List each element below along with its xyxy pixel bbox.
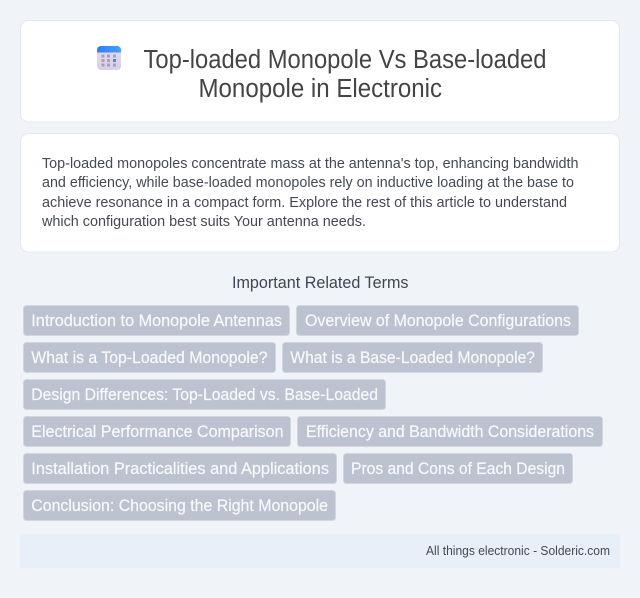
footer text: All things electronic - Solderic.com xyxy=(426,544,610,558)
tag: conclusion: Conclusion: Choosing the Right Monopole xyxy=(31,497,328,515)
tag: pros and cons xyxy=(344,454,572,484)
summary paragraph: Top-loaded monopoles concentrate mass at the antenna's top, enhancing bandwidth xyxy=(42,155,578,172)
summary paragraph xyxy=(41,155,579,230)
tag: pros and cons: Pros and Cons of Each Design xyxy=(351,460,565,478)
tag: design differences xyxy=(24,380,386,410)
title xyxy=(144,46,546,103)
tag: efficiency: Efficiency and Bandwidth Considerations xyxy=(306,423,594,441)
tag: installation: Installation Practicalities and Applications xyxy=(31,460,329,478)
tag: installation xyxy=(24,454,336,484)
title: Top-loaded Monopole Vs Base-loaded xyxy=(144,46,546,74)
tag: efficiency xyxy=(298,416,602,446)
tag: electrical performance: Electrical Performance Comparison xyxy=(31,423,283,441)
summary paragraph: and efficiency, while base-loaded monopoles rely on inductive loading at the base to xyxy=(42,174,574,191)
footer bar xyxy=(20,534,620,568)
tag: introduction xyxy=(24,306,290,336)
tag: electrical performance xyxy=(24,416,290,446)
tag: base-loaded: What is a Base-Loaded Monopole? xyxy=(290,349,535,367)
icon: calendar xyxy=(97,46,121,70)
heading: related terms: Important Related Terms xyxy=(232,274,408,292)
tag: top-loaded xyxy=(24,342,276,372)
tag list xyxy=(24,306,602,520)
tag: top-loaded: What is a Top-Loaded Monopole? xyxy=(31,349,267,367)
summary paragraph: which configuration best suits Your antenna needs. xyxy=(41,213,366,230)
tag: base-loaded xyxy=(282,342,542,372)
tag: design differences: Design Differences: Top-Loaded vs. Base-Loaded xyxy=(31,386,378,404)
panel: title card xyxy=(20,20,620,122)
tag: introduction: Introduction to Monopole Antennas xyxy=(31,312,282,330)
title: Monopole in Electronic xyxy=(198,75,442,103)
tag: overview xyxy=(296,306,578,336)
tag: conclusion xyxy=(24,490,336,520)
tag: overview: Overview of Monopole Configurations xyxy=(305,312,571,330)
summary paragraph: achieve resonance in a compact form. Explore the rest of this article to understand xyxy=(42,194,567,211)
panel: summary card xyxy=(20,134,620,252)
